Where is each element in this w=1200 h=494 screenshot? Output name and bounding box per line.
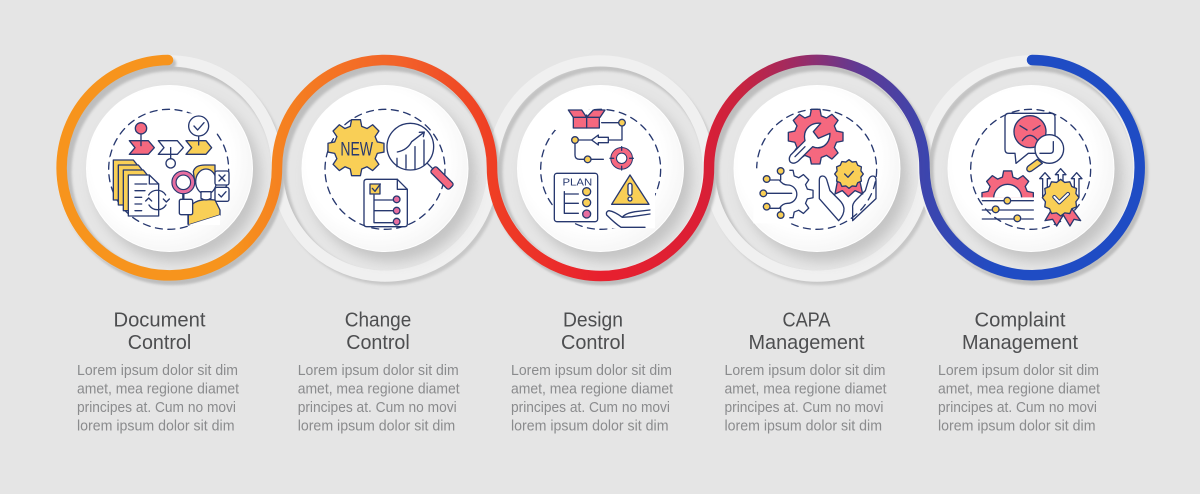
icon: CAPA management	[753, 109, 877, 229]
description: amet, mea regione diamet	[298, 382, 460, 398]
description: principes at. Cum no movi	[511, 400, 670, 416]
heading: Control	[346, 331, 410, 354]
description: principes at. Cum no movi	[724, 400, 884, 416]
description: lorem ipsum dolor sit dim	[938, 419, 1096, 435]
description: principes at. Cum no movi	[77, 400, 236, 416]
description: lorem ipsum dolor sit dim	[724, 419, 882, 435]
description	[724, 363, 886, 435]
text block: change control	[298, 308, 460, 435]
heading	[114, 308, 206, 354]
description: Lorem ipsum dolor sit dim	[938, 363, 1099, 379]
text block: document control	[77, 308, 239, 435]
description: Lorem ipsum dolor sit dim	[298, 363, 459, 379]
circle base: CAPA management	[707, 59, 933, 285]
description: lorem ipsum dolor sit dim	[298, 419, 455, 435]
flowing gradient line	[62, 60, 1140, 276]
icon: design control: PLAN	[562, 177, 592, 188]
description: amet, mea regione diamet	[938, 382, 1100, 398]
heading: Control	[561, 331, 625, 354]
icon: change control: NEW	[340, 140, 374, 161]
heading	[748, 308, 865, 354]
circle base: complaint management	[921, 59, 1147, 285]
heading	[962, 308, 1078, 354]
description: Lorem ipsum dolor sit dim	[77, 363, 238, 379]
heading: Design	[563, 308, 623, 332]
description	[77, 363, 239, 435]
heading: CAPA	[782, 308, 831, 332]
description: principes at. Cum no movi	[938, 400, 1097, 416]
heading: Control	[128, 331, 191, 354]
icon: complaint management	[971, 109, 1091, 229]
heading: Management	[748, 331, 865, 354]
heading	[561, 308, 625, 354]
icon: change control	[325, 109, 454, 229]
text block: complaint management	[938, 308, 1100, 435]
icon: design control	[541, 109, 661, 229]
description	[298, 363, 460, 435]
description: lorem ipsum dolor sit dim	[511, 419, 668, 435]
heading: Change	[345, 308, 411, 332]
circle base: design control	[490, 59, 716, 285]
circle base: change control	[275, 59, 501, 285]
description: amet, mea regione diamet	[511, 382, 673, 398]
description: lorem ipsum dolor sit dim	[77, 419, 234, 435]
text block: CAPA management	[724, 308, 886, 435]
heading: Document	[114, 308, 206, 332]
description	[938, 363, 1100, 435]
description: amet, mea regione diamet	[77, 382, 239, 398]
description: principes at. Cum no movi	[298, 400, 457, 416]
description: Lorem ipsum dolor sit dim	[724, 363, 886, 379]
text block: design control	[511, 308, 673, 435]
heading: Management	[962, 331, 1078, 354]
description	[511, 363, 673, 435]
description: Lorem ipsum dolor sit dim	[511, 363, 672, 379]
heading	[345, 308, 411, 354]
flowing gradient line shadow	[65, 63, 1143, 280]
heading: Complaint	[974, 308, 1066, 332]
icon: document control	[109, 109, 229, 229]
circle base: document control	[60, 59, 286, 285]
description: amet, mea regione diamet	[724, 382, 886, 398]
